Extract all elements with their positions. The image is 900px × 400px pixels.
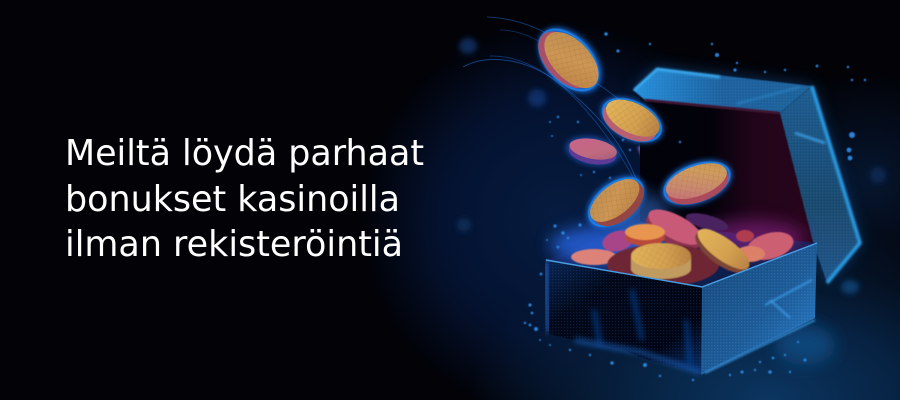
coin 5 <box>656 152 738 214</box>
motion trails <box>463 17 675 215</box>
treasure chest <box>545 68 860 375</box>
pile coin purple <box>600 227 636 255</box>
coin 3 <box>564 133 622 169</box>
coin 1 <box>527 16 613 104</box>
pile coin pink <box>641 202 708 257</box>
sparkle particles <box>524 32 866 381</box>
box left face <box>545 260 702 375</box>
heading: Meiltä löydä parhaat <box>65 133 424 174</box>
heading <box>65 133 424 265</box>
big maroon coin <box>607 244 719 286</box>
lid top band <box>633 68 812 113</box>
heading: bonukset kasinoilla <box>65 179 400 220</box>
pile coins right <box>735 227 797 265</box>
light beam <box>640 146 660 215</box>
coin 4 <box>578 166 654 238</box>
lid side band <box>780 86 860 283</box>
coin 2 <box>594 88 670 152</box>
box right face <box>701 243 817 375</box>
lid glow <box>633 68 860 283</box>
heading: ilman rekisteröintiä <box>65 224 403 265</box>
coin pile <box>571 202 797 286</box>
leaning gold coin <box>689 222 755 280</box>
lid interior <box>640 98 816 245</box>
main gold coin <box>631 243 691 279</box>
pile coin back <box>684 210 730 234</box>
chest interior glow <box>546 193 817 287</box>
pile coin salmon <box>571 249 617 265</box>
box rim <box>546 243 817 287</box>
pile coin orange <box>625 224 665 246</box>
